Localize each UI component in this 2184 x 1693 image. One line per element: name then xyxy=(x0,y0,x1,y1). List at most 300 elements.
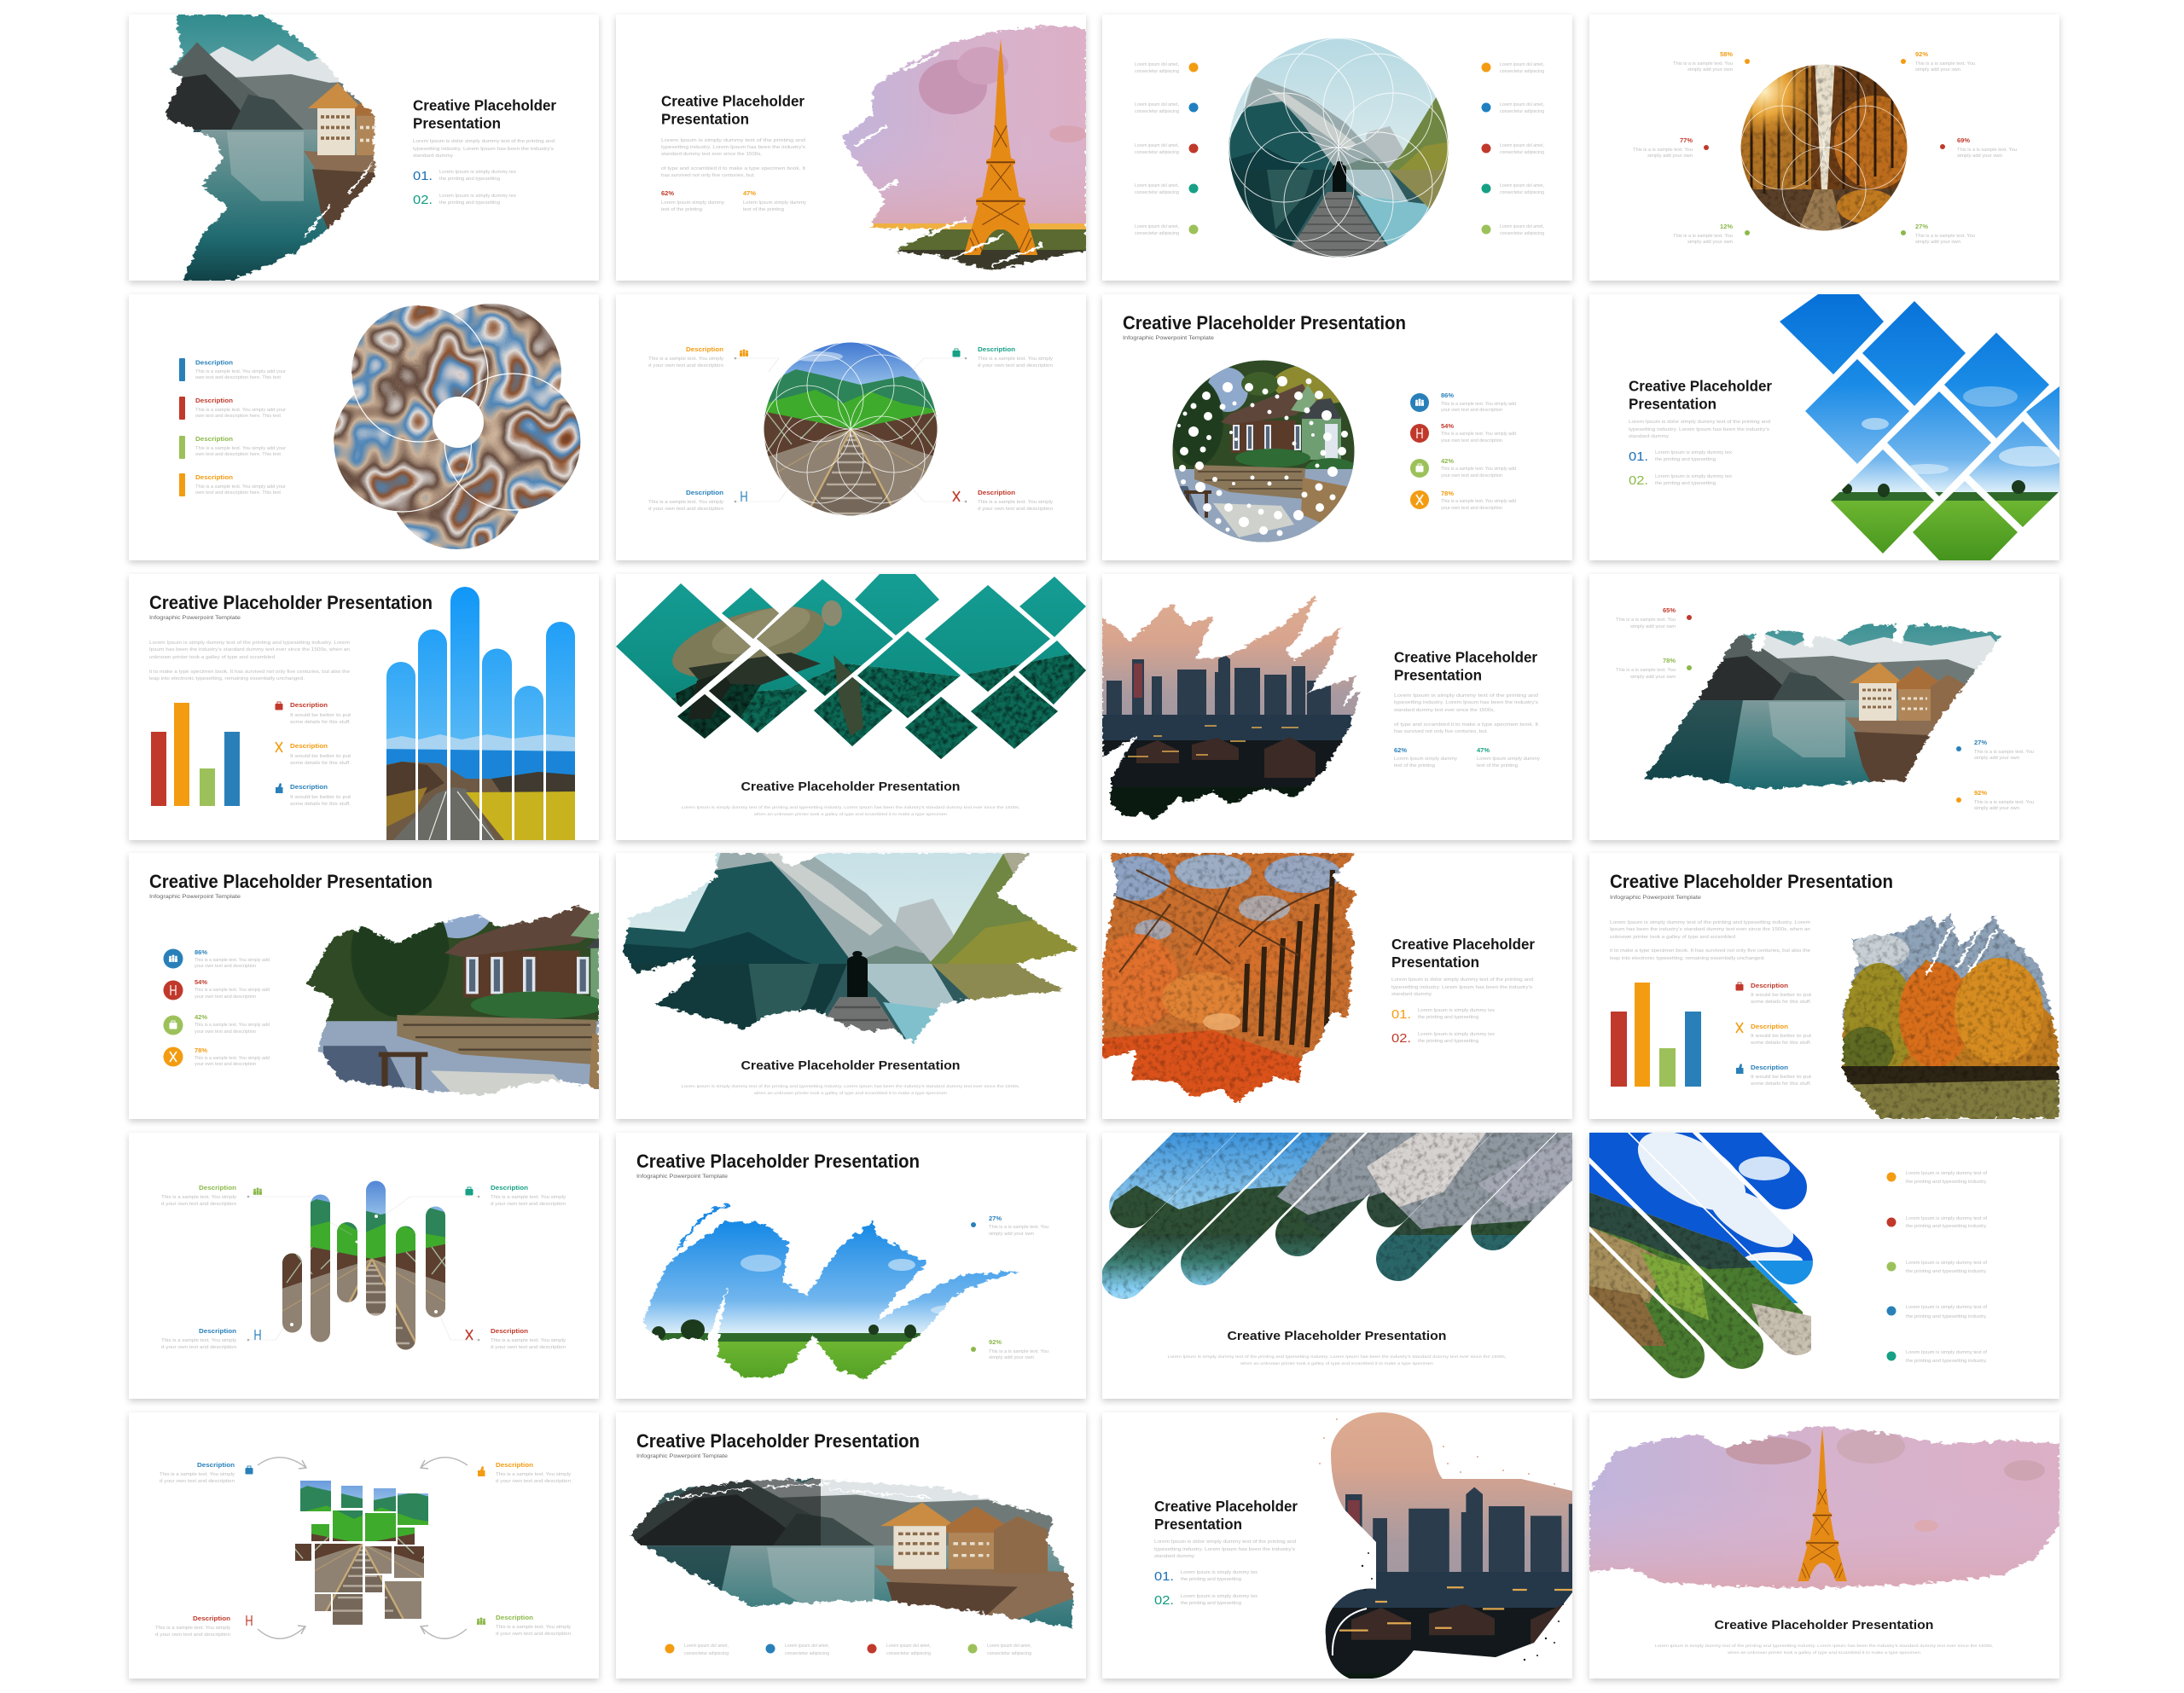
stat 86% xyxy=(1410,391,1516,413)
callout bottom right: This is a sample text. You simply xyxy=(978,500,1053,505)
body text: typesetting industry. Lorem Ipsum has been the industry's xyxy=(1394,700,1538,705)
capsule image: mountain road xyxy=(386,587,575,840)
heading xyxy=(1154,1498,1298,1533)
stat 92%: simply add your own xyxy=(1915,67,1960,72)
numbered item 01: 01. xyxy=(1154,1569,1174,1584)
bullet row: consectetur adipiscing xyxy=(886,1651,931,1656)
body text: it to make a type specimen book. It has survived not only five centuries, but also the xyxy=(149,670,350,675)
brush image: fjord xyxy=(448,682,1267,1156)
bullet row: Lorem ipsum dol amet, xyxy=(684,1644,729,1649)
right bullets: consectetur adipiscing xyxy=(1500,69,1544,74)
stat 65%: 65% xyxy=(1663,606,1676,614)
stat 42%: your own text and description xyxy=(195,1029,256,1035)
heading: Creative Placeholder Presentation xyxy=(1123,312,1406,333)
callout bottom left xyxy=(155,1615,252,1638)
description orange xyxy=(1736,1023,1812,1046)
stat 69% xyxy=(1940,136,2017,159)
bar chart xyxy=(1611,983,1701,1087)
callout bottom left: Description xyxy=(193,1615,230,1622)
bullet list: the printing and typesetting industry. xyxy=(1906,1314,1987,1319)
numbered item 02: the printing and typesetting xyxy=(1418,1039,1478,1044)
body text: Lorem Ipsum is simply dummy text of the printing and typesetting industry. Lorem Ipsum has been the industry's standard dummy text ever since the 1500s, xyxy=(1167,1354,1507,1359)
numbered item 02: the printing and typesetting xyxy=(1181,1601,1241,1606)
stat 77%: simply add your own xyxy=(1647,154,1693,159)
stat 27%: This is a is sample text. You xyxy=(1974,750,2034,755)
stat 69%: This is a is sample text. You xyxy=(1957,148,2017,153)
circle image with white dots xyxy=(1172,360,1355,542)
subtitle: Infographic Powerpoint Template xyxy=(1610,895,1701,901)
bullet list: Lorem Ipsum is simply dummy text of xyxy=(1906,1261,1987,1266)
bullet list: the printing and typesetting industry. xyxy=(1906,1359,1987,1364)
stat 86%: This is a sample text. You simply add xyxy=(1441,402,1516,407)
description orange: own text and description here. This text xyxy=(195,490,281,496)
description red xyxy=(1735,982,1812,1005)
bullet row: Lorem ipsum dol amet, xyxy=(987,1644,1031,1649)
stat 78%: simply add your own xyxy=(1630,675,1676,680)
callout top right: Description xyxy=(491,1184,528,1191)
stat 27% xyxy=(971,1215,1048,1237)
description blue: It would be better to put xyxy=(1751,1075,1812,1080)
heading: Creative Placeholder Presentation xyxy=(741,1059,961,1073)
body text: of type and scrambled it to make a type specimen book. It xyxy=(661,166,806,171)
stat 92%: simply add your own xyxy=(989,1355,1034,1360)
stat 77% xyxy=(1633,136,1709,159)
description red: It would be better to put xyxy=(1751,993,1812,998)
brush image: pink sky and eiffel tower xyxy=(1581,1412,2067,1596)
callout bottom left: This is a sample text. You simply xyxy=(161,1338,236,1343)
body text: standard dummy xyxy=(1629,434,1669,439)
stat 27%: simply add your own xyxy=(1915,240,1960,245)
description red: Description xyxy=(1751,982,1788,989)
callout top left xyxy=(161,1184,352,1235)
heading: Presentation xyxy=(661,111,749,128)
arrow top right xyxy=(421,1458,468,1469)
brush image: eiffel tower xyxy=(841,24,1086,271)
stat 27%: 27% xyxy=(989,1215,1002,1222)
numbered item 01: 01. xyxy=(1391,1007,1411,1022)
bullet row: consectetur adipiscing xyxy=(684,1651,729,1656)
callout top right xyxy=(386,1184,566,1215)
callout top left: This is a sample text. You simply xyxy=(161,1195,236,1200)
stat 65%: This is a is sample text. You xyxy=(1616,617,1676,623)
heading: Creative Placeholder xyxy=(1154,1498,1298,1515)
body text: typesetting industry. Lorem Ipsum has been the industry's xyxy=(1391,985,1532,990)
stat 47% xyxy=(743,189,806,212)
body text: Lorem Ipsum is simply dummy text of the printing and typesetting industry. Lorem xyxy=(149,641,350,646)
slide 17: railway capsules with callouts xyxy=(129,1133,599,1399)
description orange: some details for this stuff. xyxy=(1751,1041,1811,1046)
stat 54%: 54% xyxy=(195,978,207,986)
numbered item 02: 02. xyxy=(413,193,433,207)
stat 42%: This is a sample text. You simply add xyxy=(1441,467,1516,472)
description blue xyxy=(179,358,286,381)
capsule image: railway xyxy=(244,1152,500,1370)
numbered item 01: 01. xyxy=(413,169,433,183)
callout bottom left: d your own text and description xyxy=(155,1632,230,1638)
numbered item 01: 01. xyxy=(1629,449,1648,464)
numbered item 01: Lorem Ipsum is simply dummy tex xyxy=(1655,450,1732,455)
numbered item 01 xyxy=(1154,1569,1258,1584)
callout top left xyxy=(648,345,779,373)
callout top left: Description xyxy=(199,1184,236,1191)
brush image: autumn trees xyxy=(1833,904,2067,1126)
left bullets: Lorem ipsum dol amet, xyxy=(1135,183,1179,188)
left bullets: consectetur adipiscing xyxy=(1135,150,1179,155)
description blue: own text and description here. This text xyxy=(195,375,281,380)
callout bottom right: This is a sample text. You simply xyxy=(496,1625,571,1630)
stat 47%: text of the printing xyxy=(743,207,784,212)
description blue: some details for this stuff. xyxy=(290,802,351,807)
heading: Creative Placeholder Presentation xyxy=(1227,1330,1447,1343)
heading: Creative Placeholder Presentation xyxy=(1610,871,1893,892)
description blue xyxy=(276,783,351,807)
description red: Description xyxy=(195,397,233,404)
stat 86%: 86% xyxy=(1441,391,1454,399)
body text: Lorem Ipsum is dolor simply dummy text of the printing and xyxy=(1154,1539,1296,1545)
slide 10: turtle diamonds xyxy=(616,574,1086,840)
slide 11: city skyline brush with stats xyxy=(1085,574,1572,843)
description orange: It would be better to put xyxy=(1751,1034,1812,1039)
slide 22: lake brush stroke with four bullets xyxy=(516,1400,1185,1693)
stat 62%: text of the printing xyxy=(1394,763,1435,768)
slide 9: road capsules with bar chart xyxy=(129,574,599,840)
stat 65% xyxy=(1616,606,1692,629)
bullet list: Lorem Ipsum is simply dummy text of xyxy=(1906,1171,1987,1176)
subtitle: Infographic Powerpoint Template xyxy=(636,1174,728,1180)
description green: own text and description here. This text xyxy=(195,452,281,457)
description orange xyxy=(276,742,351,766)
stat 58% xyxy=(1673,50,1750,72)
body text xyxy=(681,1084,1020,1095)
body text xyxy=(1391,977,1533,997)
callout bottom left: This is a sample text. You simply xyxy=(648,500,723,505)
description orange xyxy=(179,473,286,496)
callout bottom right: d your own text and description xyxy=(496,1632,571,1637)
stat 62%: Lorem Ipsum simply dummy xyxy=(1394,757,1457,762)
stat 47%: Lorem Ipsum simply dummy xyxy=(743,200,806,206)
stat 62%: text of the printing xyxy=(661,207,702,212)
diamond collage image xyxy=(1780,294,2059,560)
stat 27%: simply add your own xyxy=(1974,756,2019,761)
right bullets: consectetur adipiscing xyxy=(1500,109,1544,114)
stat 47%: 47% xyxy=(743,189,756,197)
subtitle: Infographic Powerpoint Template xyxy=(149,615,241,621)
description blue: This is a sample text. You simply add your xyxy=(195,369,286,374)
numbered item 02: the printing and typesetting xyxy=(1655,481,1716,486)
callout top right: Description xyxy=(978,345,1015,353)
callout top left: Description xyxy=(686,345,723,353)
body text: typesetting industry. Lorem Ipsum has been the industry's xyxy=(413,147,554,152)
right bullets: Lorem ipsum dol amet, xyxy=(1500,224,1544,229)
body text: of type and scrambled it to make a type specimen book. It xyxy=(1394,722,1539,728)
brush image: lake and house xyxy=(166,14,377,281)
description orange: This is a sample text. You simply add your xyxy=(195,484,286,490)
stat 54%: 54% xyxy=(1441,422,1454,430)
brush image: lake xyxy=(1589,574,2067,847)
stat 12% xyxy=(1673,223,1750,245)
stat 92% xyxy=(971,1338,1048,1360)
right bullets xyxy=(1481,62,1544,236)
slide 19: alpine lake diagonal capsules xyxy=(1102,1133,1572,1399)
description blue: some details for this stuff. xyxy=(1751,1081,1811,1087)
description orange: some details for this stuff. xyxy=(290,761,351,766)
body text: it to make a type specimen book. It has survived not only five centuries, but also the xyxy=(1610,948,1810,954)
brush image: sky and field xyxy=(616,1135,1128,1410)
bullet row: consectetur adipiscing xyxy=(785,1651,829,1656)
body text xyxy=(1394,693,1539,734)
left bullets xyxy=(1135,62,1198,236)
subtitle: Infographic Powerpoint Template xyxy=(149,894,241,900)
stat 54%: your own text and description xyxy=(195,994,256,1000)
callout top right: d your own text and description xyxy=(496,1479,571,1484)
heading: Presentation xyxy=(1394,667,1482,684)
body text xyxy=(1610,920,1810,961)
callout top left: d your own text and description xyxy=(161,1202,236,1207)
heading: Presentation xyxy=(413,114,501,131)
callout top right xyxy=(910,345,1053,373)
heading: Creative Placeholder xyxy=(1394,648,1537,665)
heading xyxy=(1394,648,1537,684)
subtitle: Infographic Powerpoint Template xyxy=(1123,335,1214,341)
stat 62% xyxy=(1394,746,1457,768)
brush image: house xyxy=(293,842,707,1169)
circle image: forest path xyxy=(1740,65,1908,230)
callout top right: d your own text and description xyxy=(491,1202,566,1207)
callout top left: d your own text and description xyxy=(648,363,723,368)
slide 18: sky and field brush with stats xyxy=(616,1133,1128,1410)
callout top left xyxy=(160,1461,253,1484)
slide 3: fjord circle with ten bullets xyxy=(1099,14,1575,287)
stat 27%: 27% xyxy=(1974,739,1987,746)
body text: Lorem Ipsum is dolor simply dummy text of the printing and xyxy=(413,139,555,144)
stat 58%: This is a is sample text. You xyxy=(1673,61,1733,67)
slide 20: amalfi coast diagonal capsules with bullets xyxy=(1589,1116,2059,1406)
bullet list xyxy=(1887,1171,1987,1364)
numbered item 02 xyxy=(1391,1031,1495,1046)
left bullets: consectetur adipiscing xyxy=(1135,69,1179,74)
callout bottom right xyxy=(910,486,1053,512)
heading: Creative Placeholder Presentation xyxy=(636,1151,920,1172)
numbered item 02: 02. xyxy=(1154,1593,1174,1608)
description red: It would be better to put xyxy=(290,713,351,718)
description red: Description xyxy=(290,701,328,709)
left bullets: consectetur adipiscing xyxy=(1135,190,1179,195)
stat 62%: 62% xyxy=(661,189,674,197)
numbered item 02 xyxy=(1154,1593,1258,1608)
slide 4: autumn forest circle with six stats xyxy=(1589,14,2059,281)
stat 92%: This is a is sample text. You xyxy=(989,1349,1048,1354)
body text: Lorem Ipsum is simply dummy text of the printing and typesetting industry. Lorem Ipsum has been the industry's standard dummy text ever since the 1500s, xyxy=(681,1084,1020,1088)
description green: This is a sample text. You simply add your xyxy=(195,446,286,451)
left bullets: consectetur adipiscing xyxy=(1135,109,1179,114)
stat 12%: This is a is sample text. You xyxy=(1673,234,1733,239)
callout bottom right: Description xyxy=(491,1327,528,1335)
description blue xyxy=(1736,1064,1812,1087)
callout top right: This is a sample text. You simply xyxy=(491,1195,566,1200)
stat 86%: your own text and description xyxy=(195,964,256,969)
right bullets: Lorem ipsum dol amet, xyxy=(1500,102,1544,107)
numbered item 02: the printing and typesetting xyxy=(439,200,500,206)
stat 78%: This is a is sample text. You xyxy=(1616,668,1676,673)
slide 7: dotted house circle with four stats xyxy=(1102,294,1572,571)
left bullets: consectetur adipiscing xyxy=(1135,231,1179,236)
stat 54%: This is a sample text. You simply add xyxy=(1441,432,1516,437)
numbered item 01: the printing and typesetting xyxy=(1181,1577,1241,1582)
callout bottom right: This is a sample text. You simply xyxy=(491,1338,566,1343)
stat 47% xyxy=(1477,746,1540,768)
body text: standard dummy text ever since the 1500s, xyxy=(661,152,762,157)
stat 54% xyxy=(1410,422,1516,444)
slide 2: eiffel tower brush mask xyxy=(616,14,1094,281)
stat 47%: text of the printing xyxy=(1477,763,1518,768)
callout top left: This is a sample text. You simply xyxy=(648,357,723,362)
numbered item 01: Lorem Ipsum is simply dummy tex xyxy=(439,170,516,175)
callout bottom right xyxy=(477,1614,571,1637)
numbered item 02 xyxy=(413,193,516,207)
stat 27%: This is a is sample text. You xyxy=(989,1225,1048,1230)
body text xyxy=(1655,1644,1993,1655)
numbered item 01: Lorem Ipsum is simply dummy tex xyxy=(1181,1570,1258,1575)
body text: has survived not only five centuries, but. xyxy=(1394,729,1488,734)
heading xyxy=(1391,936,1535,971)
stat 69%: 69% xyxy=(1957,136,1970,144)
body text xyxy=(413,139,555,159)
body text: has survived not only five centuries, but. xyxy=(661,173,755,178)
callout bottom left: Description xyxy=(686,489,723,496)
arrow top left xyxy=(258,1458,306,1469)
body text xyxy=(661,138,806,178)
body text: Lorem Ipsum is dolor simply dummy text of the printing and xyxy=(1391,977,1533,983)
stat 92% xyxy=(1956,789,2034,811)
callout top right: This is a sample text. You simply xyxy=(978,357,1053,362)
stat 92%: This is a is sample text. You xyxy=(1915,61,1975,67)
body text: when an unknown printer took a galley of type and scrambled it to make a type specimen xyxy=(754,812,948,816)
left bullets: Lorem ipsum dol amet, xyxy=(1135,102,1179,107)
numbered item 01 xyxy=(413,169,516,183)
callout bottom left xyxy=(161,1327,284,1350)
body text: typesetting industry. Lorem Ipsum has been the industry's xyxy=(661,145,805,150)
slide 16: autumn trees brush with bar chart xyxy=(1589,853,2067,1126)
callout bottom left: d your own text and description xyxy=(161,1345,236,1350)
numbered item 02: Lorem Ipsum is simply dummy tex xyxy=(1181,1594,1258,1599)
left bullets: Lorem ipsum dol amet, xyxy=(1135,143,1179,148)
flower-shaped graffiti image xyxy=(329,299,585,554)
body text: standard dummy xyxy=(413,154,453,159)
heading: Presentation xyxy=(1154,1516,1242,1533)
bar chart xyxy=(151,703,240,806)
body text: when an unknown printer took a galley of type and scrambled it to make a type specimen xyxy=(754,1091,948,1095)
callout top left: d your own text and description xyxy=(160,1479,235,1484)
right bullets: Lorem ipsum dol amet, xyxy=(1500,183,1544,188)
slide 12: lake parallelogram with four stats xyxy=(1589,574,2067,847)
stat 86%: your own text and description xyxy=(1441,408,1502,413)
stat 78% xyxy=(1410,490,1516,511)
stat 86%: This is a sample text. You simply add xyxy=(195,958,270,963)
heading: Presentation xyxy=(1629,396,1716,413)
heading: Creative Placeholder Presentation xyxy=(741,780,961,794)
bullet list: Lorem Ipsum is simply dummy text of xyxy=(1906,1350,1987,1355)
description orange: Description xyxy=(290,742,328,750)
callout top left: This is a sample text. You simply xyxy=(160,1472,235,1477)
stat 69%: simply add your own xyxy=(1957,154,2002,159)
stat 62% xyxy=(661,189,724,212)
callout bottom left: Description xyxy=(199,1327,236,1335)
slide 6: railway circle with four callouts xyxy=(616,294,1086,560)
stat 54% xyxy=(164,978,270,1000)
stat 78%: your own text and description xyxy=(1441,506,1502,511)
capsule image: alpine lake xyxy=(1102,1133,1572,1303)
body text: standard dummy xyxy=(1391,992,1432,997)
heading: Creative Placeholder xyxy=(413,97,556,114)
stat 54%: This is a sample text. You simply add xyxy=(195,988,270,993)
numbered item 01: the printing and typesetting xyxy=(439,177,500,182)
stat 58%: simply add your own xyxy=(1687,67,1733,72)
numbered item 01: the printing and typesetting xyxy=(1418,1015,1478,1020)
arrow bottom right xyxy=(421,1626,467,1638)
subtitle: Infographic Powerpoint Template xyxy=(636,1453,728,1459)
mosaic image: railway xyxy=(235,1441,491,1651)
slide 13: house brush with four stats xyxy=(129,842,707,1169)
description orange: It would be better to put xyxy=(290,754,351,759)
right bullets: consectetur adipiscing xyxy=(1500,150,1544,155)
numbered item 01: Lorem Ipsum is simply dummy tex xyxy=(1418,1008,1495,1013)
body text xyxy=(681,805,1020,816)
description red: own text and description here. This text xyxy=(195,414,281,419)
heading xyxy=(661,92,804,128)
heading: Creative Placeholder xyxy=(1391,936,1535,953)
stat 12%: 12% xyxy=(1720,223,1733,230)
description red: some details for this stuff. xyxy=(290,720,351,725)
slide 5: graffiti flower with description list xyxy=(129,294,599,560)
stat 62%: Lorem Ipsum simply dummy xyxy=(661,200,724,206)
body text xyxy=(149,641,350,681)
numbered item 02 xyxy=(1629,473,1732,488)
heading xyxy=(413,97,556,131)
bullet list: the printing and typesetting industry. xyxy=(1906,1224,1987,1229)
description blue: Description xyxy=(195,358,233,367)
callout bottom left: d your own text and description xyxy=(648,507,723,512)
body text: Lorem Ipsum is dolor simply dummy text of the printing and xyxy=(1629,420,1770,425)
callout top right: Description xyxy=(496,1461,533,1469)
body text: Lorem Ipsum is simply dummy text of the printing and xyxy=(1394,693,1538,699)
stat 92%: This is a is sample text. You xyxy=(1974,800,2034,805)
stat 86% xyxy=(164,948,270,969)
bullet list: the printing and typesetting industry. xyxy=(1906,1180,1987,1185)
callout top left: Description xyxy=(197,1461,235,1469)
stat 86%: 86% xyxy=(195,948,207,956)
stat 92%: 92% xyxy=(1974,789,1987,797)
body text: unknown printer took a galley of type and scrambled xyxy=(149,655,275,660)
heading: Creative Placeholder Presentation xyxy=(149,592,433,613)
stat 92%: 92% xyxy=(1915,50,1928,58)
slide 15: autumn alley splash with numbered list xyxy=(1094,844,1572,1126)
numbered item 02: Lorem Ipsum is simply dummy tex xyxy=(439,194,516,199)
body text: Lorem Ipsum is simply dummy text of the printing and xyxy=(661,138,805,143)
slide 24: eiffel brush panorama with centred title xyxy=(1581,1412,2067,1679)
numbered item 01 xyxy=(1629,449,1732,464)
bullet list: the printing and typesetting industry. xyxy=(1906,1269,1987,1274)
right bullets: consectetur adipiscing xyxy=(1500,231,1544,236)
stat 78%: This is a sample text. You simply add xyxy=(195,1056,270,1061)
slide 23: city blobs with numbered list xyxy=(1102,1375,1710,1693)
heading: Presentation xyxy=(1391,954,1479,971)
callout top right: d your own text and description xyxy=(978,363,1053,368)
numbered item 02: Lorem Ipsum is simply dummy tex xyxy=(1655,474,1732,479)
callout bottom right xyxy=(440,1316,566,1350)
callout top right xyxy=(478,1461,571,1484)
callout bottom left: This is a sample text. You simply xyxy=(155,1626,230,1631)
stat 42%: 42% xyxy=(195,1013,207,1021)
